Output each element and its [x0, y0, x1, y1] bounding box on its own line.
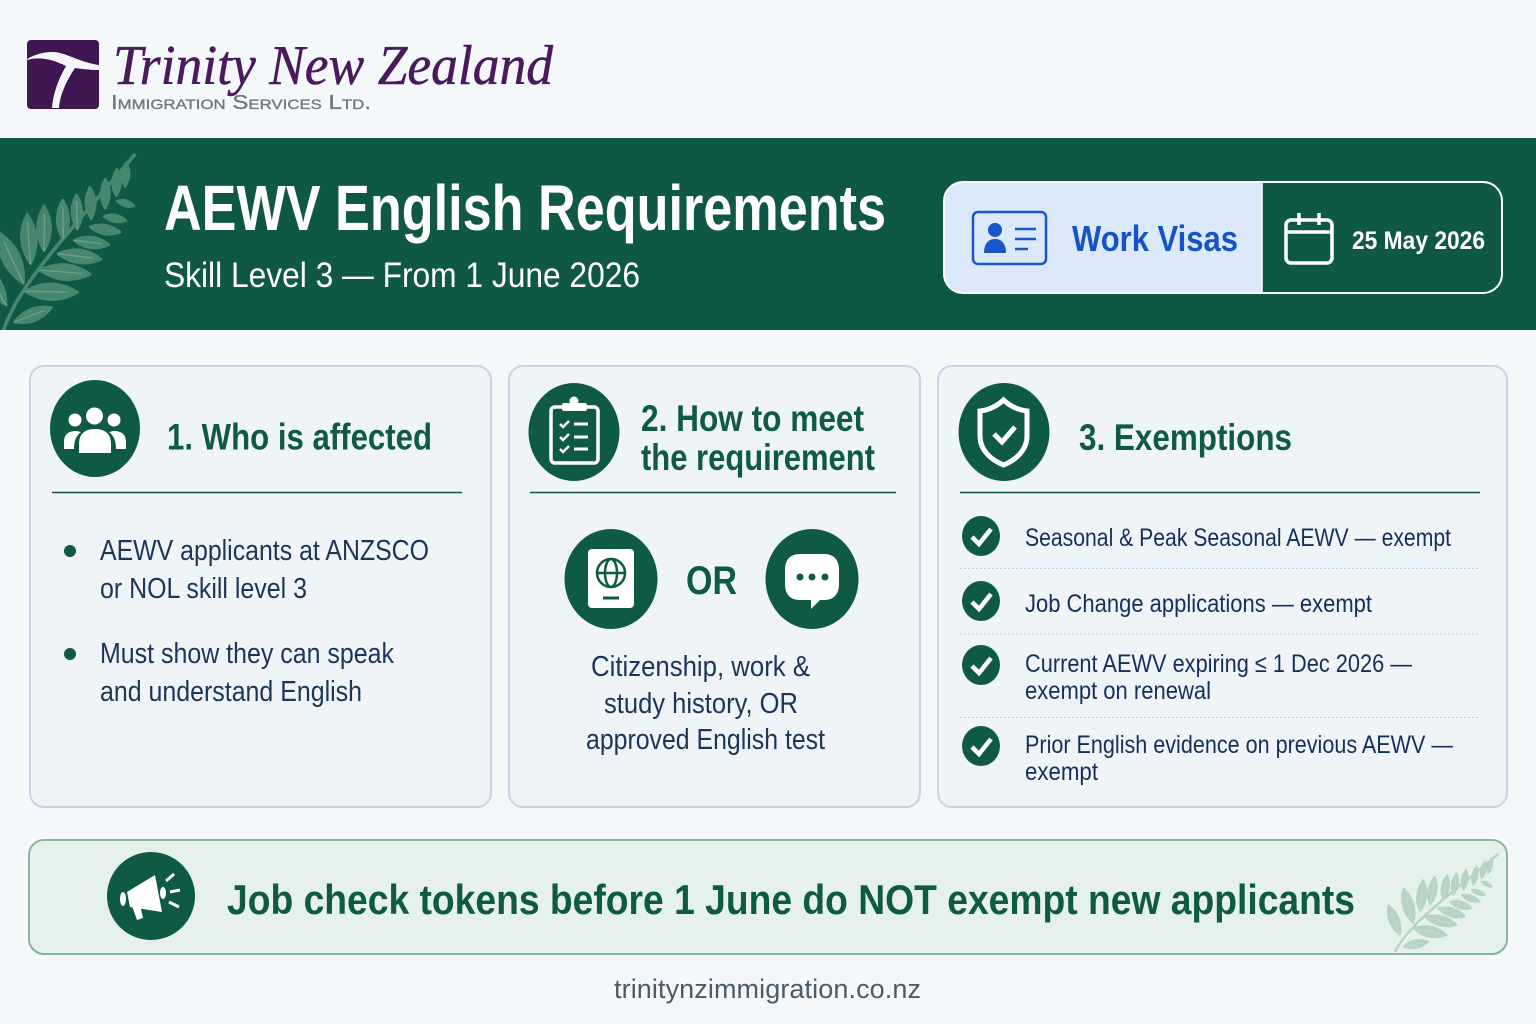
logo mark [27, 40, 99, 109]
exemption: seasonal [962, 516, 1451, 556]
exemption: prior evidence: exempt [1025, 758, 1098, 786]
icon: people [50, 380, 140, 477]
logo subtitle: Immigration Services Ltd. [111, 92, 371, 114]
body text: approved English test [586, 724, 825, 756]
icon: calendar [1286, 213, 1332, 263]
heading: 1. Who is affected [167, 416, 432, 458]
icon: speech bubble [766, 529, 858, 629]
fern decoration: header [0, 152, 136, 330]
subtitle: Skill Level 3 — From 1 June 2026 [164, 256, 640, 295]
header band [0, 138, 1536, 334]
bullet item: must show: Must show they can speak [100, 638, 394, 670]
icon: clipboard checklist [528, 383, 620, 481]
heading [641, 398, 875, 478]
panel: how to meet the requirement [509, 366, 920, 807]
bullet item: must show [64, 638, 394, 708]
body text [586, 651, 825, 756]
exemption: seasonal: Seasonal & Peak Seasonal AEWV — exempt [1025, 524, 1451, 552]
panel: exemptions [938, 366, 1507, 807]
logo: Trinity New Zealand [27, 35, 554, 114]
bullet item: applicants: AEWV applicants at ANZSCO [100, 535, 429, 567]
bullet item: must show: and understand English [100, 676, 362, 708]
callout banner [29, 840, 1507, 954]
exemption: job change [962, 581, 1372, 621]
OR label: OR [686, 559, 737, 603]
date: 25 May 2026 [1352, 227, 1485, 255]
bullet item: applicants: or NOL skill level 3 [100, 573, 307, 605]
bullet item: applicants [64, 535, 429, 605]
exemption: current AEWV: Current AEWV expiring ≤ 1 Dec 2026 — [1025, 650, 1412, 678]
icon: visa ID card [973, 212, 1046, 264]
logo wordmark: Trinity New Zealand [113, 35, 554, 97]
icon: passport [564, 529, 658, 629]
footer website: trinitynzimmigration.co.nz [614, 974, 921, 1004]
icon: megaphone [107, 852, 195, 940]
heading: the requirement [641, 437, 875, 478]
exemption: prior evidence: Prior English evidence on previous AEWV — [1025, 731, 1453, 759]
fern decoration: banner [1388, 854, 1498, 952]
body text: Citizenship, work & [591, 651, 810, 683]
heading: 2. How to meet [641, 398, 864, 439]
heading: 3. Exemptions [1079, 417, 1292, 458]
category label: Work Visas [1072, 218, 1238, 259]
exemption: prior evidence [962, 726, 1453, 786]
exemption: job change: Job Change applications — exempt [1025, 590, 1372, 618]
callout text: Job check tokens before 1 June do NOT exempt new applicants [227, 876, 1355, 923]
exemption: current AEWV [962, 645, 1412, 705]
icon: shield [958, 383, 1050, 481]
panel: who is affected [30, 366, 491, 807]
title: AEWV English Requirements [164, 172, 886, 244]
exemption: current AEWV: exempt on renewal [1025, 677, 1211, 705]
category and date pill [944, 182, 1502, 293]
body text: study history, OR [604, 688, 798, 720]
